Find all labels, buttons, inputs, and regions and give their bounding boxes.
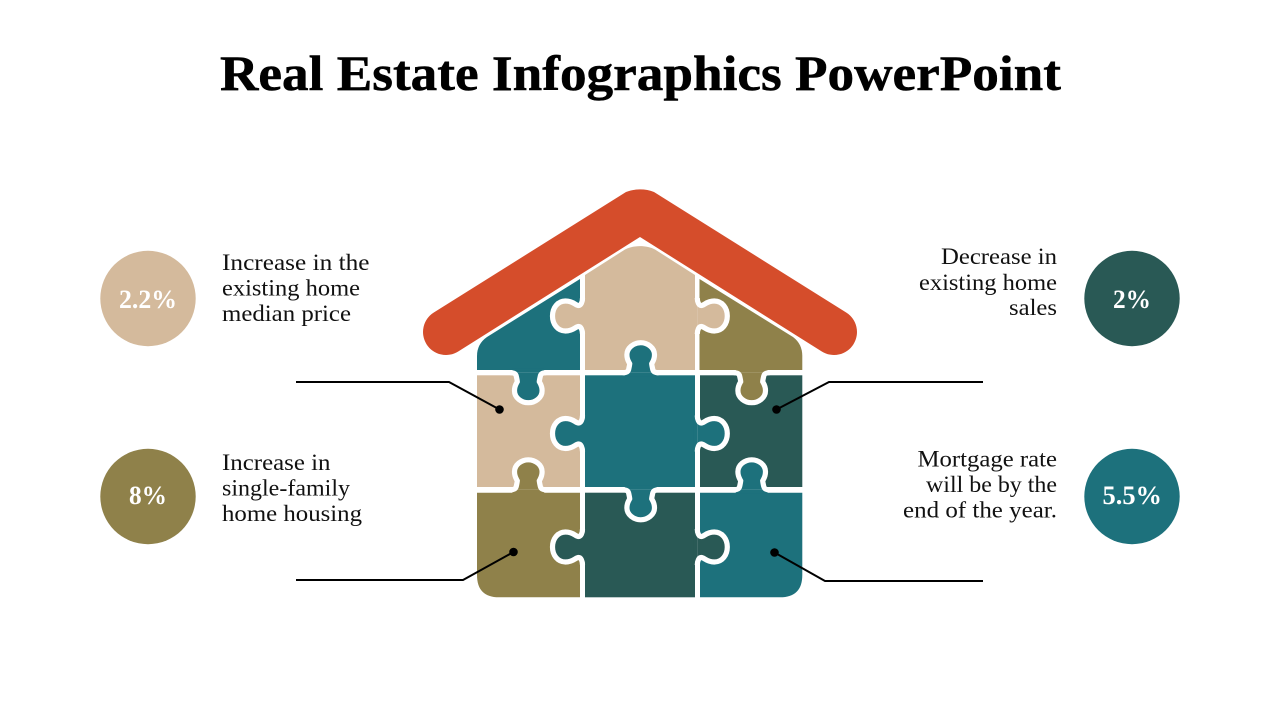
puzzle house <box>477 246 802 597</box>
text: existing home median price <box>222 250 370 326</box>
text: existing home median price: median price <box>222 301 351 326</box>
piece: bottom left <box>477 493 580 597</box>
stat badge: 2%: 2% <box>1113 284 1151 314</box>
leader line: top right <box>772 382 983 414</box>
text: existing home median price: existing home <box>222 276 360 301</box>
text: existing home sales: sales <box>1009 295 1057 320</box>
house roof <box>423 189 857 355</box>
piece: bottom right <box>700 493 802 597</box>
piece: top middle <box>585 246 695 370</box>
text: existing home median price: Increase in the <box>222 250 370 275</box>
stat badge: 5.5%: 5.5% <box>1102 480 1162 510</box>
knob: teal up into top middle <box>623 343 659 377</box>
leader line: top left <box>296 382 504 414</box>
text: existing home sales <box>919 244 1058 320</box>
title: Real Estate Infographics PowerPoint <box>220 45 1061 101</box>
text: mortgage rate: Mortgage rate <box>918 447 1057 472</box>
text: mortgage rate: end of the year. <box>903 497 1057 522</box>
text: mortgage rate <box>903 447 1057 522</box>
stat badge: 2% <box>1084 251 1180 346</box>
text: mortgage rate: will be by the <box>926 472 1057 497</box>
knob: tan into top left <box>552 298 586 334</box>
text: single-family home housing <box>222 450 363 526</box>
knob: dark into bottom left <box>552 529 586 565</box>
piece: center <box>585 375 695 487</box>
stat badge: 2.2% <box>100 251 196 346</box>
text: single-family home housing: Increase in <box>222 450 331 475</box>
piece: middle left <box>477 375 580 487</box>
text: single-family home housing: home housing <box>222 501 363 526</box>
stat badge: 8% <box>100 449 196 544</box>
leader line: bottom right <box>770 548 983 581</box>
knob: tan into top right <box>693 298 727 334</box>
text: single-family home housing: single-family <box>222 476 351 501</box>
knob: dark into bottom right <box>693 529 727 565</box>
knob: olive down into middle right <box>734 369 770 403</box>
piece: top left <box>477 279 580 370</box>
knob: teal down into middle left <box>510 369 546 403</box>
leader line: bottom left <box>296 548 518 580</box>
piece: middle right <box>700 375 802 487</box>
knob: teal down into bottom middle <box>623 486 659 520</box>
text: existing home sales: existing home <box>919 270 1057 295</box>
piece: top right <box>700 279 802 370</box>
knob: teal into middle right <box>693 416 727 452</box>
knob: olive up into middle left <box>510 460 546 494</box>
stat badge: 2.2%: 2.2% <box>119 284 177 314</box>
knob: teal up into middle right <box>734 460 770 494</box>
stat badge: 8%: 8% <box>129 480 167 510</box>
stat badge: 5.5% <box>1084 449 1180 544</box>
knob: teal into middle left <box>552 416 586 452</box>
text: existing home sales: Decrease in <box>941 244 1058 269</box>
piece: bottom middle <box>585 493 695 597</box>
